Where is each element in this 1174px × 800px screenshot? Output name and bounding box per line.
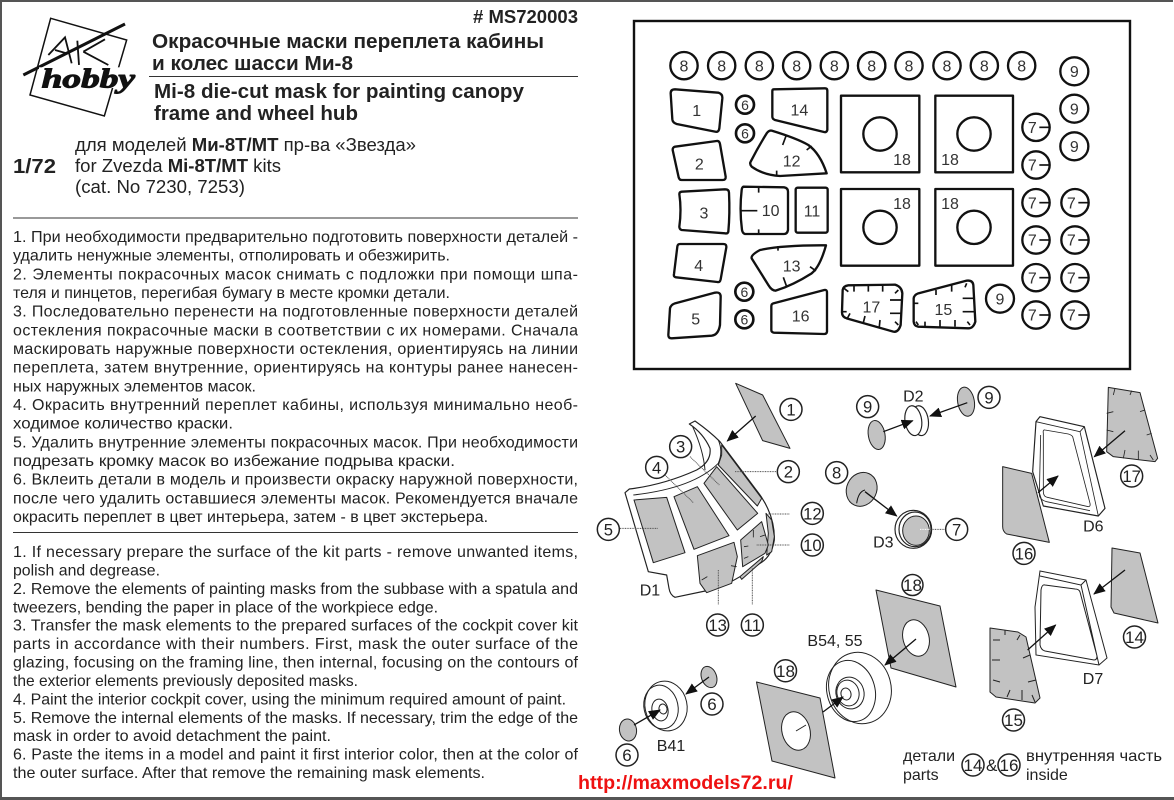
D3 hub: [873, 510, 932, 552]
masks 9: 9: [1070, 64, 1079, 81]
arrow: lower disc 6 to B41: [634, 710, 660, 725]
mask 1: [671, 89, 722, 132]
instructions: Russian: окрасить переплет в цвет интерьера, затем - в цвет экстерьера.: [13, 509, 488, 526]
callout 5: [597, 518, 619, 540]
masks 7: 7: [1028, 233, 1037, 250]
D3 hub: D3: [873, 535, 894, 552]
masks 18: 18: [893, 152, 911, 169]
masks 9: 9: [1070, 101, 1079, 118]
mask 13: 13: [783, 259, 801, 276]
instructions: English: 1. If necessary prepare the surface of the kit parts - remove unwanted items,: [13, 544, 578, 561]
kit compatibility text: для моделей Ми-8Т/МТ пр-ва «Звезда»: [75, 135, 416, 155]
mask 5: 5: [691, 312, 700, 329]
instructions: English: tweezers, bending the paper in place of the workpiece edge.: [13, 599, 438, 616]
mask 5: [668, 292, 721, 338]
mask 8 disc: [841, 467, 883, 511]
instructions: Russian: после чего удалить оставшиеся элементы масок. Рекомендуется вначале: [13, 490, 578, 507]
mask 6 disc upper: [698, 664, 720, 690]
D7 frame: D7: [1083, 671, 1103, 688]
legend: parts 14 and 16 inside: &: [986, 756, 998, 775]
instructions: English: 5. Remove the internal elements of the masks. If necessary, trim the edge of the: [13, 710, 578, 727]
canopy pane 2: [718, 445, 762, 506]
callout 1: 1: [786, 400, 796, 419]
canopy pane 5: [634, 497, 685, 563]
row of mask 8 circles (left): 8: [680, 58, 689, 75]
legend: parts 14 and 16 inside: [903, 748, 1162, 784]
mask 16 piece: [1003, 467, 1049, 542]
instructions: Russian: [13, 229, 578, 526]
mask 10: 10: [762, 203, 780, 220]
mask 3: [679, 189, 729, 233]
mask 2: 2: [695, 156, 704, 173]
masks 7: 7: [1028, 270, 1037, 287]
mask 6 disc lower: [618, 718, 638, 742]
callout 8: [826, 462, 848, 484]
callout 17: 17: [1122, 467, 1141, 486]
mask tick marks: [702, 530, 765, 580]
row of mask 8 circles (right): [858, 52, 1035, 79]
mask 11: [796, 188, 828, 233]
arrow: disc 8 to D3: [865, 492, 897, 516]
instructions: English: glazing, focusing on the framing line, then internal, focusing on the contours of: [13, 654, 579, 672]
arrow: disc 9 to D2 left: [883, 421, 913, 432]
logo: AK hobby: [23, 18, 136, 116]
mask 4: [674, 244, 726, 282]
row of mask 8 circles (left): [670, 52, 885, 79]
mask 15: 15: [934, 302, 952, 319]
arrow: mask 18 to wheel: [885, 639, 916, 665]
masks 18: 18: [893, 196, 911, 213]
wheel B54, 55: B54, 55: [807, 633, 863, 650]
callout 18 lower: 18: [776, 662, 795, 681]
mask 18 upper: [876, 590, 956, 687]
callout 1: [780, 398, 802, 420]
mask 1 piece: [736, 383, 790, 448]
masks 18: 18: [941, 152, 959, 169]
title: Russian: [152, 30, 544, 75]
masks 9: 9: [1070, 139, 1079, 156]
kit compatibility text: [75, 135, 416, 197]
row of mask 8 circles (right): 8: [943, 58, 952, 75]
title: Russian: и колес шасси Ми-8: [152, 52, 353, 75]
instructions: Russian: остекления покрасочные маски в соответствии с их номерами. Сначала: [13, 322, 578, 339]
legend: parts 14 and 16 inside: parts: [903, 767, 939, 784]
mask 16: 16: [792, 309, 810, 326]
instructions: Russian: маскировать наружные поверхности остекления, ориентируясь на линии: [13, 341, 578, 358]
masks 7: [1022, 114, 1089, 329]
callout 7 with leader: 7: [952, 520, 961, 539]
row of mask 8 circles (left): 8: [792, 58, 801, 75]
callout 5: 5: [604, 520, 613, 539]
scale: 1/72: [13, 156, 56, 178]
instructions: English: polish and degrease.: [13, 562, 160, 579]
instructions: English: mask in order to avoid detachment the paint.: [13, 728, 331, 745]
masks 7: 7: [1028, 195, 1037, 212]
title: English: [154, 80, 525, 125]
D1 label: D1: [640, 583, 660, 600]
masks 18: [841, 96, 1013, 266]
D6 frame: D6: [1083, 519, 1104, 536]
canopy pane 10: [741, 522, 768, 567]
row of mask 8 circles (left): 8: [717, 58, 726, 75]
callout 4: 4: [652, 458, 661, 477]
callout 16: 16: [1015, 544, 1033, 563]
row of mask 8 circles (right): 8: [867, 58, 876, 75]
callout 14: 14: [1125, 628, 1144, 647]
callout 13: 13: [708, 616, 727, 635]
canopy pane 3: [704, 467, 758, 530]
instructions: Russian: 2. Элементы покрасочных масок снимать с подложки при помощи шпа-: [13, 266, 578, 283]
callout 6 left: 6: [622, 746, 632, 765]
mask 17 piece: [1107, 387, 1158, 462]
legend: parts 14 and 16 inside: внутренняя часть: [1026, 748, 1162, 765]
article number: # MS720003: [473, 7, 578, 27]
row of mask 8 circles (left): 8: [755, 58, 764, 75]
instructions: English: [13, 544, 579, 782]
arrow: mask 14 to D7: [1094, 570, 1125, 594]
mask 11: 11: [804, 204, 820, 221]
masks 7: 7: [1067, 233, 1076, 250]
canopy pane 11: [740, 557, 763, 579]
panel: mask sheet frame: [634, 21, 1130, 369]
instructions: English: 4. Paint the interior cockpit cover, using the minimum required amount of paint.: [13, 691, 566, 708]
wheel B41: [640, 677, 692, 755]
mask 17: [842, 285, 902, 332]
callout 7 with leader: [920, 518, 968, 540]
arrow: mask 16 to D6: [1038, 476, 1058, 493]
callout 2: [777, 461, 799, 483]
diagram: parts D2, D3, D6: [826, 386, 1158, 564]
D2 hub: [903, 389, 930, 437]
canopy pane 4: [674, 487, 729, 549]
wheel B41: B41: [657, 738, 685, 755]
instructions: English: the exterior elements previously deposited masks.: [13, 673, 358, 690]
mask 18 lower: [756, 682, 835, 778]
mask 4: 4: [694, 258, 703, 275]
arrow: lower mask 18 to wheel: [823, 697, 843, 712]
masks 7: 7: [1067, 308, 1076, 325]
callouts 9: 9: [863, 398, 872, 417]
instructions: Russian: переплета, затем внутренние, ориентируясь на контуры ранее нанесен-: [13, 360, 578, 377]
callout 2: 2: [784, 463, 793, 482]
masks 6: 6: [741, 97, 749, 113]
title: Russian: Окрасочные маски переплета кабины: [152, 30, 544, 53]
website URL: http://maxmodels72.ru/: [578, 773, 794, 794]
instructions: Russian: 5. Удалить внутренние элементы покрасочных масок. При необходимости: [13, 434, 578, 451]
instructions: Russian: 3. Последовательно перенести на подготовленные поверхности деталей: [13, 304, 578, 321]
canopy pane 12: [766, 513, 774, 555]
masks 7: 7: [1028, 158, 1037, 175]
legend: parts 14 and 16 inside: inside: [1026, 767, 1068, 784]
instructions: Russian: ходимое количество краски.: [13, 416, 233, 433]
kit compatibility text: for Zvezda Mi-8T/MT kits: [75, 156, 281, 176]
arrow: mask 1 to canopy: [727, 416, 756, 441]
title: English: frame and wheel hub: [154, 102, 358, 125]
callout 6 left: [616, 744, 638, 766]
masks 7: 7: [1028, 308, 1037, 325]
D6 frame: [1033, 417, 1105, 536]
row of mask 8 circles (right): 8: [905, 58, 914, 75]
instructions: Russian: 6. Вклеить детали в модель и произвести окраску наружной поверхности,: [13, 472, 578, 489]
masks 6: [735, 96, 754, 328]
callouts 9: 9: [984, 388, 994, 407]
arrow: disc 6 to B41: [686, 677, 709, 694]
mask 12: [750, 131, 827, 176]
mask 2: [673, 141, 726, 180]
mask 3: 3: [700, 206, 709, 223]
mask 1: 1: [692, 103, 701, 120]
callout 4: [646, 456, 668, 478]
mask 17: 17: [862, 300, 880, 317]
callout 10: 10: [803, 536, 822, 555]
D7 frame: [1035, 571, 1107, 688]
masks 6: 6: [741, 126, 749, 142]
mask 14 piece: [1111, 548, 1158, 623]
part D1 body: [625, 421, 774, 597]
mask sheet: right half: [841, 52, 1089, 332]
instructions: Russian: 4. Окрасить внутренний переплет кабины, используя минимально необ-: [13, 397, 578, 414]
callout 6 right: 6: [707, 695, 717, 714]
arrow: mask 17 to D6: [1094, 431, 1125, 457]
diagram: canopy labels and mask 1: [597, 383, 823, 636]
instructions: English: the outer surface. After that remove the remaining mask elements.: [13, 765, 485, 782]
callout 8: 8: [832, 464, 841, 483]
mask 15 piece: [990, 628, 1040, 703]
wheel B54, 55: [807, 633, 899, 731]
mask 15: [914, 281, 975, 328]
row of mask 8 circles (right): 8: [980, 58, 989, 75]
row of mask 8 circles (right): 8: [1017, 58, 1026, 75]
instructions: English: parts in accordance with their numbers. First, mask the outer surface of the: [13, 636, 578, 653]
arrow: mask 15 to D7: [1028, 625, 1056, 650]
callout 18 upper: 18: [903, 576, 922, 595]
logo: AK hobby: hobby: [42, 63, 136, 93]
row of mask 8 circles (left): 8: [867, 58, 876, 75]
masks 7: 7: [1067, 195, 1076, 212]
diagram: canopy D1: [620, 421, 790, 605]
kit compatibility text: (cat. No 7230, 7253): [75, 177, 245, 197]
masks 6: 6: [740, 312, 748, 328]
callouts 9: [857, 386, 1000, 418]
mask 12: 12: [783, 154, 801, 171]
instructions: Russian: подрезать кромку масок во избежание подрыва краски.: [13, 453, 455, 470]
dotted leader lines: [620, 457, 790, 605]
canopy pane 13: [697, 542, 737, 593]
instructions: English: 2. Remove the elements of painting masks from the subbase with a spatula and: [13, 581, 578, 598]
legend: parts 14 and 16 inside: 16: [1000, 756, 1018, 775]
D2 hub: D2: [903, 389, 924, 406]
masks 6: 6: [740, 284, 748, 300]
masks 18: 18: [941, 196, 959, 213]
instructions: Russian: ных наружных элементов масок.: [13, 378, 256, 395]
masks 9: 9: [996, 291, 1005, 308]
mask sheet: left half: [668, 52, 885, 338]
instructions: Russian: удалить ненужные элементы, отполировать и обезжирить.: [13, 248, 450, 265]
mask 14: [772, 88, 827, 132]
mask 13: [752, 245, 826, 291]
masks 7: 7: [1028, 120, 1037, 137]
masks 7: 7: [1067, 270, 1076, 287]
callout 15: 15: [1004, 711, 1023, 730]
callout 6 right: [701, 693, 723, 715]
masks 9: [986, 57, 1088, 313]
legend: parts 14 and 16 inside: 14: [964, 756, 982, 775]
instructions: English: 6. Paste the items in a model and paint it first interior color, then at the color of: [13, 747, 579, 764]
mask 16: [771, 290, 827, 334]
instructions: English: 3. Transfer the mask elements to the prepared surfaces of the cockpit cover kit: [13, 618, 579, 635]
row of mask 8 circles (left): 8: [830, 58, 839, 75]
callout 3: [670, 436, 692, 458]
mask 10: [741, 187, 788, 234]
mask 9 discs: [866, 386, 977, 451]
callout 3: 3: [676, 438, 685, 457]
instructions: Russian: 1. При необходимости предварительно подготовить поверхности деталей -: [13, 229, 578, 246]
legend: parts 14 and 16 inside: детали: [903, 748, 955, 765]
instructions: Russian: теля и пинцетов, перегибая бумагу в месте кромки детали.: [13, 285, 450, 302]
mask 14: 14: [790, 102, 808, 119]
callout 11: 11: [744, 616, 761, 635]
arrow: disc 9 to D2 right: [930, 403, 967, 416]
title: English: Mi-8 die-cut mask for painting canopy: [154, 80, 525, 103]
callout 12: 12: [803, 504, 822, 523]
canopy framing arcs: [633, 427, 721, 495]
callout 11: [741, 614, 763, 636]
